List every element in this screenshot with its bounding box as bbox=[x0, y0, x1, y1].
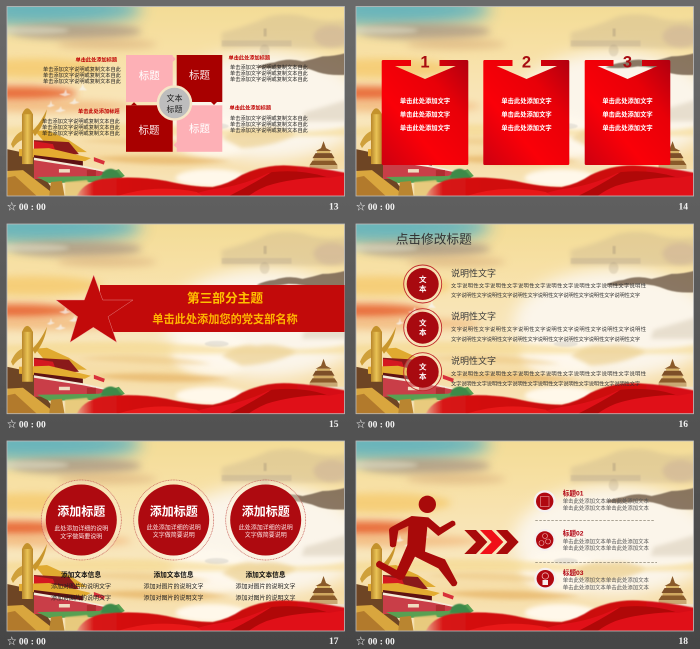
slide 16 frame bbox=[356, 224, 694, 414]
list item 2: 说明性文字 bbox=[451, 311, 496, 322]
caption 1: 添加对图片的说明文字 bbox=[51, 594, 111, 602]
text block: lower left: 单击此处添加标题 bbox=[78, 107, 120, 115]
list item 01: 单击此处添加文本单击此处添加文本 bbox=[563, 497, 650, 505]
caption 3 bbox=[235, 570, 296, 602]
card 1: 单击此处添加文字 bbox=[400, 96, 450, 105]
footer: slide 18 bbox=[356, 636, 688, 648]
list item 1: 本 bbox=[419, 284, 427, 294]
caption 1: 添加文本信息 bbox=[61, 570, 101, 579]
caption 1 bbox=[51, 570, 111, 602]
footer: slide 13: ☆ 00 : 00 bbox=[7, 202, 46, 213]
caption 3: 添加对图片的说明文字 bbox=[235, 594, 296, 602]
footer: slide 16: ☆ 00 : 00 bbox=[356, 420, 395, 430]
footer: slide 17 bbox=[7, 636, 339, 648]
text block: lower right: 单击添加文字说明或复制文本自此 bbox=[230, 120, 309, 128]
footer: slide 15: ☆ 00 : 00 bbox=[7, 420, 46, 430]
text block: upper right: 单击添加文字说明或复制文本自此 bbox=[230, 69, 309, 77]
icon: star bbox=[56, 275, 133, 342]
circle 3: 文字做简要说明 bbox=[245, 531, 287, 539]
text block: upper left: 单击添加文字说明或复制文本自此 bbox=[43, 65, 122, 73]
quadrant diagram: 标题 bbox=[166, 104, 182, 114]
card 3: 单击此处添加文字 bbox=[602, 96, 653, 105]
panel: slide 13 bbox=[0, 0, 364, 213]
panel: slide 15 bbox=[0, 210, 364, 430]
list item 2: 文 bbox=[419, 318, 427, 328]
section title: 第三部分主题 bbox=[187, 290, 263, 305]
slide 17 frame bbox=[7, 441, 344, 631]
card 2: 单击此处添加文字 bbox=[501, 110, 552, 118]
footer: slide 14 bbox=[356, 202, 688, 213]
text block: upper right: 单击添加文字说明或复制文本自此 bbox=[230, 75, 309, 83]
quadrant diagram: 标题 bbox=[189, 70, 210, 82]
text block: lower left bbox=[42, 107, 121, 137]
panel: slide 18 bbox=[281, 427, 700, 648]
list item 02: 标题02 bbox=[563, 528, 584, 538]
slide 15 background bbox=[0, 210, 364, 420]
circle 2: 添加标题 bbox=[150, 504, 198, 519]
list item 03 bbox=[534, 568, 650, 591]
caption 2: 添加文本信息 bbox=[153, 570, 194, 579]
text block: upper right bbox=[228, 54, 309, 83]
circle 2: 文字做简要说明 bbox=[153, 531, 195, 539]
list item 03: 单击此处添加文本单击此处添加文本 bbox=[563, 583, 650, 591]
circle 3: 添加标题 bbox=[242, 504, 290, 519]
circle 2 bbox=[134, 480, 214, 560]
footer: slide 16: 16 bbox=[678, 420, 688, 430]
list item 3 bbox=[404, 353, 647, 391]
text block: lower left: 单击添加文字说明或复制文本自此 bbox=[42, 117, 121, 125]
list item 2: 文字说明性文字说明性文字说明性文字说明性文字说明性文字说明性文字说明性文字 bbox=[451, 335, 640, 343]
list item 2: 本 bbox=[419, 327, 427, 337]
footer: slide 14: 14 bbox=[678, 202, 688, 212]
list item 1: 文字说明性文字说明性文字说明性文字说明性文字说明性文字说明性文字说明性文字 bbox=[451, 291, 640, 299]
footer: slide 13: 13 bbox=[329, 202, 339, 212]
circle 1: 文字做简要说明 bbox=[60, 533, 102, 541]
text block: upper left: 单击此处添加标题 bbox=[76, 56, 118, 64]
list item 03: 单击此处添加文本单击此处添加文本 bbox=[563, 576, 650, 584]
slide 18 frame bbox=[356, 441, 694, 631]
text block: lower right: 单击此处添加标题 bbox=[230, 103, 272, 111]
text block: upper right: 单击添加文字说明或复制文本自此 bbox=[230, 63, 309, 71]
list item 01: 单击此处添加文本单击此处添加文本 bbox=[563, 504, 650, 512]
list item 3: 说明性文字 bbox=[451, 355, 496, 366]
list item 3: 文字说明性文字说明性文字说明性文字说明性文字说明性文字说明性文字说明性文字 bbox=[451, 379, 640, 387]
caption 3: 添加对图片的说明文字 bbox=[235, 582, 296, 590]
list item 2 bbox=[404, 309, 647, 347]
footer: slide 13 bbox=[7, 202, 339, 213]
card 1: 单击此处添加文字 bbox=[400, 123, 450, 132]
card 2: 单击此处添加文字 bbox=[501, 123, 552, 132]
text block: lower left: 单击添加文字说明或复制文本自此 bbox=[42, 123, 121, 131]
icon: running person bbox=[376, 496, 457, 586]
list item 3: 本 bbox=[419, 371, 427, 381]
circle 3 bbox=[226, 480, 306, 560]
caption 2: 添加对图片的说明文字 bbox=[143, 594, 204, 602]
list item 02: 单击此处添加文本单击此处添加文本 bbox=[563, 544, 650, 552]
slide heading: 点击修改标题 bbox=[396, 232, 472, 246]
circle 1 bbox=[41, 480, 121, 560]
list item 02 bbox=[534, 528, 650, 552]
list item 1: 文字说明性文字说明性文字说明性文字说明性文字说明性文字说明性文字说明性 bbox=[451, 282, 647, 290]
caption 1: 添加对图片的说明文字 bbox=[51, 582, 111, 590]
text block: lower right: 单击添加文字说明或复制文本自此 bbox=[230, 114, 309, 122]
list item 1 bbox=[404, 265, 647, 303]
caption 2: 添加对图片的说明文字 bbox=[143, 582, 204, 590]
footer: slide 16 bbox=[356, 420, 688, 430]
slide 13 background bbox=[0, 0, 364, 202]
title band bbox=[100, 285, 344, 332]
quadrant diagram: 标题 bbox=[138, 124, 160, 136]
circle 2: 此处添加详细的说明 bbox=[147, 524, 201, 532]
circle 3: 此处添加详细的说明 bbox=[239, 524, 293, 532]
footer: slide 15: 15 bbox=[329, 420, 339, 430]
card 3 bbox=[585, 54, 670, 165]
card 1: 单击此处添加文字 bbox=[400, 110, 450, 118]
list item 1: 说明性文字 bbox=[451, 267, 496, 278]
list item 01 bbox=[534, 488, 650, 512]
text block: lower right bbox=[230, 103, 309, 134]
text block: lower left: 单击添加文字说明或复制文本自此 bbox=[42, 129, 121, 137]
circle 1: 此处添加详细的说明 bbox=[54, 525, 108, 533]
list item 3: 文字说明性文字说明性文字说明性文字说明性文字说明性文字说明性文字说明性 bbox=[451, 369, 647, 377]
card 2: 单击此处添加文字 bbox=[501, 96, 552, 105]
slide 17 background bbox=[0, 427, 364, 637]
panel: slide 17 bbox=[0, 427, 364, 648]
slide 15 frame bbox=[7, 224, 344, 414]
card 1 bbox=[382, 54, 468, 165]
card 2: 2 bbox=[522, 54, 531, 72]
text block: upper left bbox=[43, 56, 122, 85]
section title: 单击此处添加您的党支部名称 bbox=[152, 312, 298, 326]
list item 3: 文 bbox=[419, 362, 427, 372]
slide 13 frame bbox=[7, 6, 344, 196]
footer: slide 18: 18 bbox=[678, 637, 688, 647]
caption 3: 添加文本信息 bbox=[245, 570, 286, 579]
quadrant diagram: 标题 bbox=[189, 123, 210, 135]
list item 01: 标题01 bbox=[563, 488, 584, 498]
list item 02: 单击此处添加文本单击此处添加文本 bbox=[563, 537, 650, 545]
footer: slide 17: 17 bbox=[329, 637, 339, 647]
card 3: 单击此处添加文字 bbox=[602, 123, 653, 132]
text block: upper right: 单击此处添加标题 bbox=[228, 54, 271, 62]
footer: slide 17: ☆ 00 : 00 bbox=[7, 636, 46, 648]
panel: slide 16 bbox=[281, 210, 700, 430]
text block: lower right: 单击添加文字说明或复制文本自此 bbox=[230, 126, 309, 134]
slide 14 frame bbox=[356, 6, 694, 196]
card 1: 1 bbox=[420, 54, 430, 72]
text block: upper left: 单击添加文字说明或复制文本自此 bbox=[43, 77, 122, 85]
section title bbox=[152, 290, 298, 326]
list item 1: 文 bbox=[419, 274, 427, 284]
footer: slide 14: ☆ 00 : 00 bbox=[356, 202, 395, 213]
slide 18 background bbox=[281, 427, 700, 637]
footer: slide 18: ☆ 00 : 00 bbox=[356, 636, 395, 648]
slide 16 background bbox=[281, 210, 700, 420]
quadrant diagram: 文本 bbox=[166, 93, 182, 103]
caption 2 bbox=[143, 570, 204, 602]
slide 14 background bbox=[281, 0, 700, 202]
panel: slide 14 bbox=[281, 0, 700, 213]
footer: slide 15 bbox=[7, 420, 339, 430]
list item 03: 标题03 bbox=[563, 568, 584, 577]
quadrant diagram: 标题 bbox=[139, 70, 160, 82]
card 3: 单击此处添加文字 bbox=[602, 110, 653, 118]
list item 2: 文字说明性文字说明性文字说明性文字说明性文字说明性文字说明性文字说明性 bbox=[451, 325, 647, 333]
text block: upper left: 单击添加文字说明或复制文本自此 bbox=[43, 71, 122, 79]
arrow: chevrons bbox=[464, 530, 519, 554]
quadrant diagram bbox=[126, 55, 222, 152]
card 3: 3 bbox=[623, 54, 632, 72]
card 2 bbox=[483, 54, 569, 165]
circle 1: 添加标题 bbox=[57, 504, 105, 519]
